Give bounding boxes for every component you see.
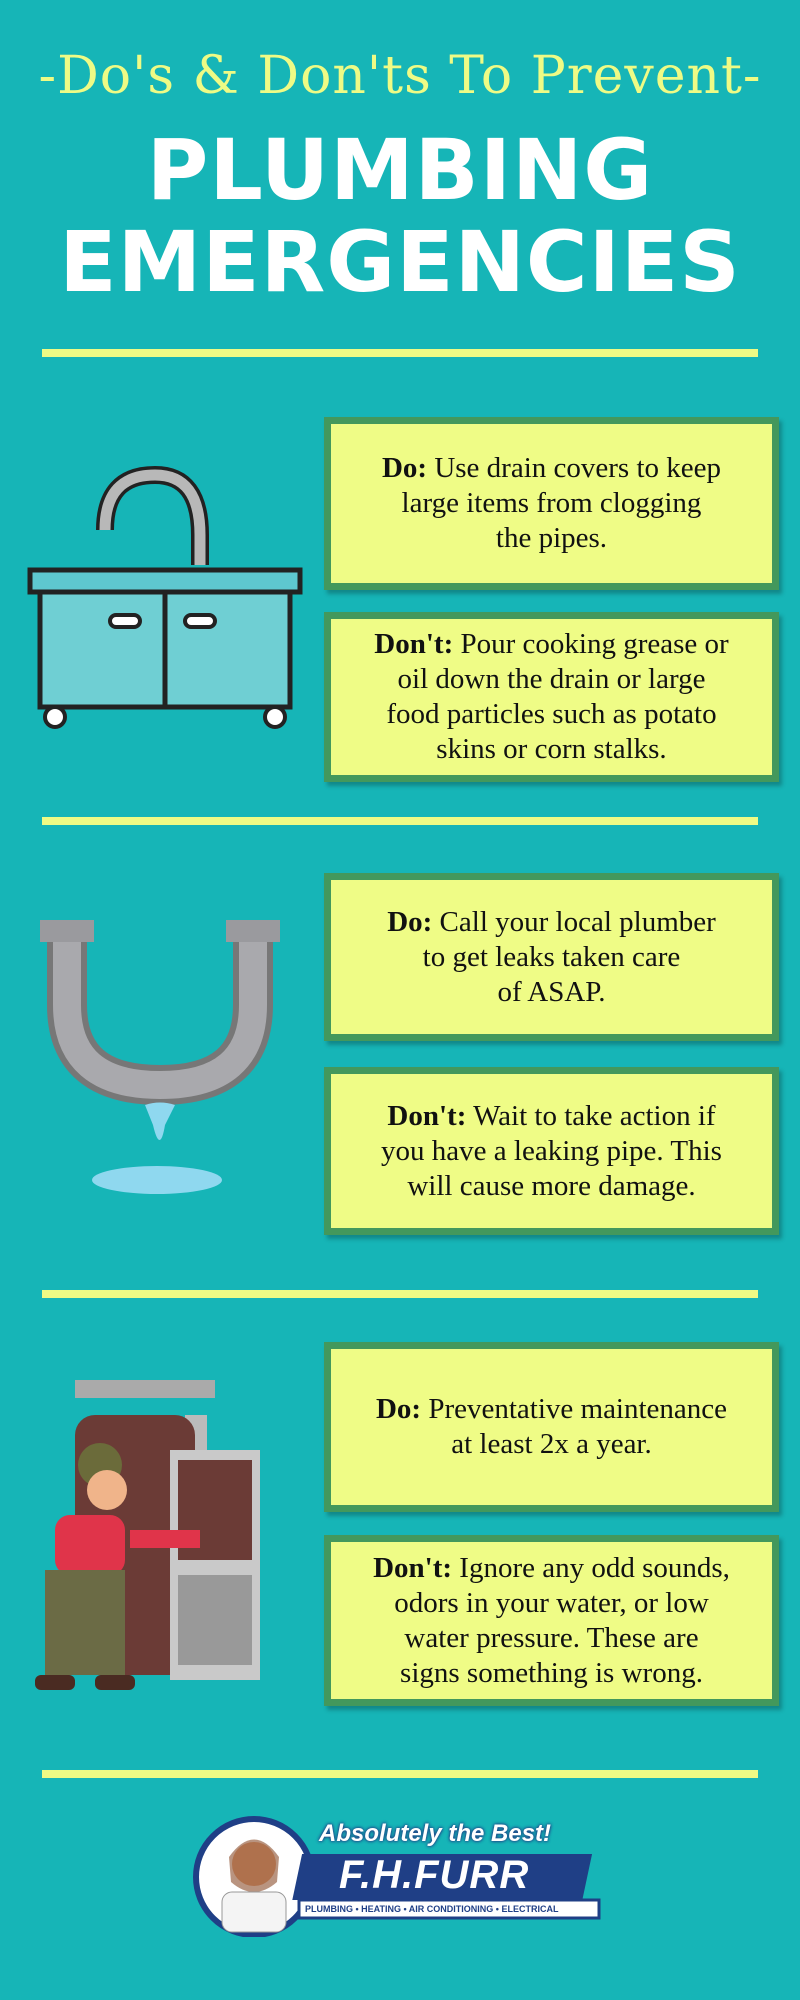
box: do 3 xyxy=(324,1342,779,1512)
subtitle: -Do's & Don'ts To Prevent- xyxy=(38,46,762,106)
title: EMERGENCIES xyxy=(59,213,741,311)
box: dont 2: Don't: Wait to take action if xyxy=(387,1100,716,1132)
box: dont 2: you have a leaking pipe. This xyxy=(381,1134,722,1166)
box: dont 1: skins or corn stalks. xyxy=(436,733,667,765)
logo: F.H.FURR xyxy=(339,1853,529,1897)
box: dont 3: water pressure. These are xyxy=(404,1622,699,1654)
box: do 2 xyxy=(324,873,779,1041)
box: dont 1 xyxy=(324,612,779,782)
icon: leaking pipe xyxy=(40,920,280,1194)
box: dont 3: odors in your water, or low xyxy=(394,1586,709,1618)
box: do 1 xyxy=(324,417,779,590)
icon: water heater and plumber xyxy=(35,1380,260,1690)
logo xyxy=(193,1816,600,1937)
title: PLUMBING xyxy=(147,121,653,219)
box: dont 3: signs something is wrong. xyxy=(400,1656,703,1688)
box: do 3: at least 2x a year. xyxy=(451,1428,652,1460)
box: do 3: Do: Preventative maintenance xyxy=(376,1393,727,1425)
box: do 1: the pipes. xyxy=(496,522,607,554)
logo: Absolutely the Best! xyxy=(319,1820,551,1847)
box: do 2: Do: Call your local plumber xyxy=(387,906,716,938)
icon: sink xyxy=(28,466,302,729)
box: dont 3 xyxy=(324,1535,779,1706)
box: do 1: Do: Use drain covers to keep xyxy=(382,452,721,484)
box: do 2: to get leaks taken care xyxy=(423,940,680,972)
box: do 2: of ASAP. xyxy=(497,976,605,1008)
box: do 1: large items from clogging xyxy=(402,487,701,519)
box: dont 1: Don't: Pour cooking grease or xyxy=(374,628,729,660)
box: dont 2 xyxy=(324,1067,779,1235)
logo: PLUMBING • HEATING • AIR CONDITIONING • ELECTRICAL xyxy=(305,1904,558,1914)
title xyxy=(59,121,741,311)
box: dont 2: will cause more damage. xyxy=(407,1170,696,1202)
box: dont 3: Don't: Ignore any odd sounds, xyxy=(373,1552,730,1584)
box: dont 1: food particles such as potato xyxy=(386,698,717,730)
box: dont 1: oil down the drain or large xyxy=(398,663,705,695)
